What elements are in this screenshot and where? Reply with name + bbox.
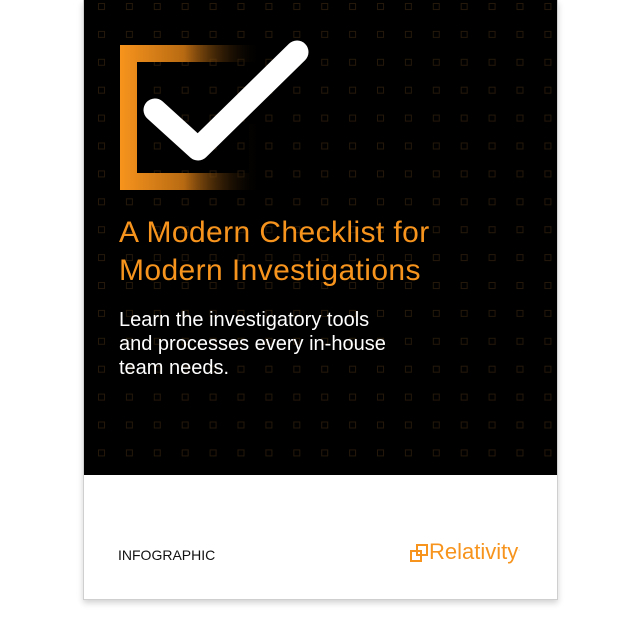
subtitle: and processes every in-house	[119, 333, 386, 355]
label: infographic: INFOGRAPHIC	[118, 547, 215, 563]
logo: Relativity: Relativity.	[429, 539, 520, 564]
black cover area	[84, 0, 557, 475]
subtitle	[119, 309, 386, 379]
title: Modern Investigations	[119, 254, 421, 287]
subtitle: team needs.	[119, 357, 229, 379]
subtitle: Learn the investigatory tools	[119, 309, 369, 331]
icon: checkbox	[120, 45, 297, 190]
title	[119, 216, 430, 287]
document card	[83, 0, 558, 600]
title: A Modern Checklist for	[119, 216, 430, 249]
